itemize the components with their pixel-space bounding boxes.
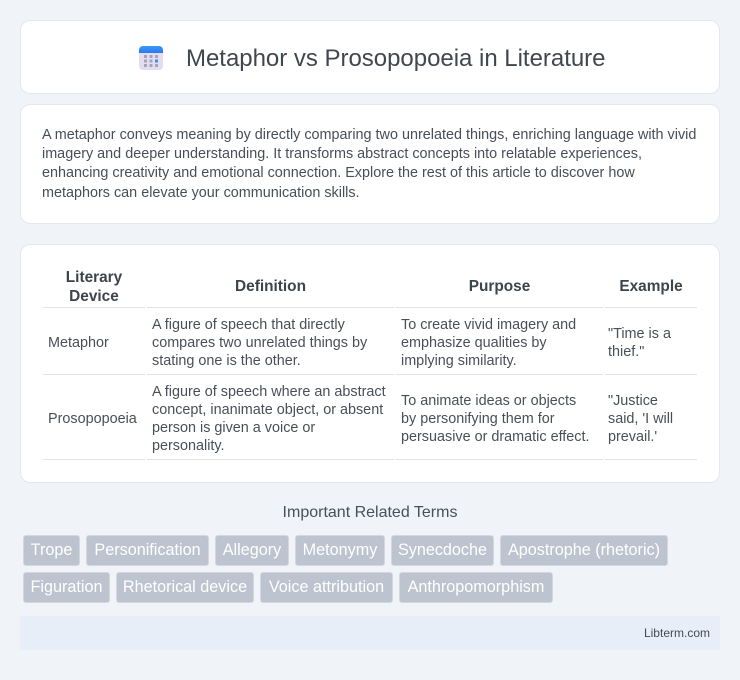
row: prosopopoeia — [48, 384, 673, 454]
row: metaphor: compares two unrelated things by — [152, 335, 367, 351]
row: prosopopoeia: Prosopopoeia — [48, 411, 137, 427]
row: prosopopoeia: A figure of speech where an abstract — [152, 384, 386, 400]
related terms heading: Important Related Terms — [283, 504, 457, 521]
row: metaphor: A figure of speech that directly — [152, 317, 345, 333]
row: metaphor: Metaphor — [48, 335, 109, 351]
intro panel — [20, 104, 720, 224]
comparison table panel — [20, 244, 720, 483]
row: prosopopoeia: person is given a voice or — [152, 420, 315, 436]
row: metaphor: "Time is a — [608, 326, 671, 342]
row: metaphor: To create vivid imagery and — [401, 317, 576, 333]
related terms tags — [23, 535, 668, 603]
intro text: enhancing creativity and emotional connection. Explore the rest of this article to discover how — [42, 165, 635, 181]
row: metaphor: thief." — [608, 344, 644, 360]
footer credit: Libterm.com — [644, 626, 710, 640]
row: prosopopoeia: concept, inanimate object, or absent — [152, 402, 383, 418]
related terms tags: Metonymy — [303, 541, 377, 559]
title: Metaphor vs Prosopopoeia in Literature — [186, 45, 606, 72]
row: prosopopoeia: persuasive or dramatic effect. — [401, 429, 590, 445]
row: prosopopoeia: prevail.' — [608, 429, 657, 445]
intro text: A metaphor conveys meaning by directly comparing two unrelated things, enriching language with vivid — [42, 127, 696, 143]
row: prosopopoeia: by personifying them for — [401, 411, 555, 427]
table header: Definition — [235, 278, 306, 295]
icon: calendar grid — [139, 46, 163, 70]
table header: Example — [619, 278, 683, 295]
table header — [66, 269, 683, 305]
row: metaphor: implying similarity. — [401, 353, 517, 369]
related terms tags: Anthropomorphism — [408, 578, 544, 596]
row: metaphor: emphasize qualities by — [401, 335, 547, 351]
related terms tags: Voice attribution — [269, 578, 384, 596]
table header: Purpose — [469, 278, 530, 295]
related terms tags: Trope — [31, 541, 72, 559]
row: prosopopoeia: "Justice — [608, 393, 658, 409]
related terms tags: Synecdoche — [398, 541, 487, 559]
related terms tags: Rhetorical device — [123, 578, 247, 596]
row: prosopopoeia: personality. — [152, 438, 225, 454]
intro text — [42, 127, 696, 201]
related terms tags: Allegory — [223, 541, 281, 559]
row: metaphor: stating one is the other. — [152, 353, 301, 369]
row: prosopopoeia: To animate ideas or objects — [401, 393, 576, 409]
related terms tags: Apostrophe (rhetoric) — [508, 541, 660, 559]
table header: Literary Device — [66, 269, 122, 305]
row: metaphor — [48, 317, 671, 369]
row: prosopopoeia: said, 'I will — [608, 411, 673, 427]
footer bar — [20, 616, 720, 650]
intro text: metaphors can elevate your communication skills. — [42, 185, 360, 201]
header panel — [20, 20, 720, 94]
related terms tags: Figuration — [30, 578, 102, 596]
intro text: imagery and deeper understanding. It transforms abstract concepts into relatable experiences, — [42, 146, 642, 162]
related terms tags: Personification — [94, 541, 201, 559]
